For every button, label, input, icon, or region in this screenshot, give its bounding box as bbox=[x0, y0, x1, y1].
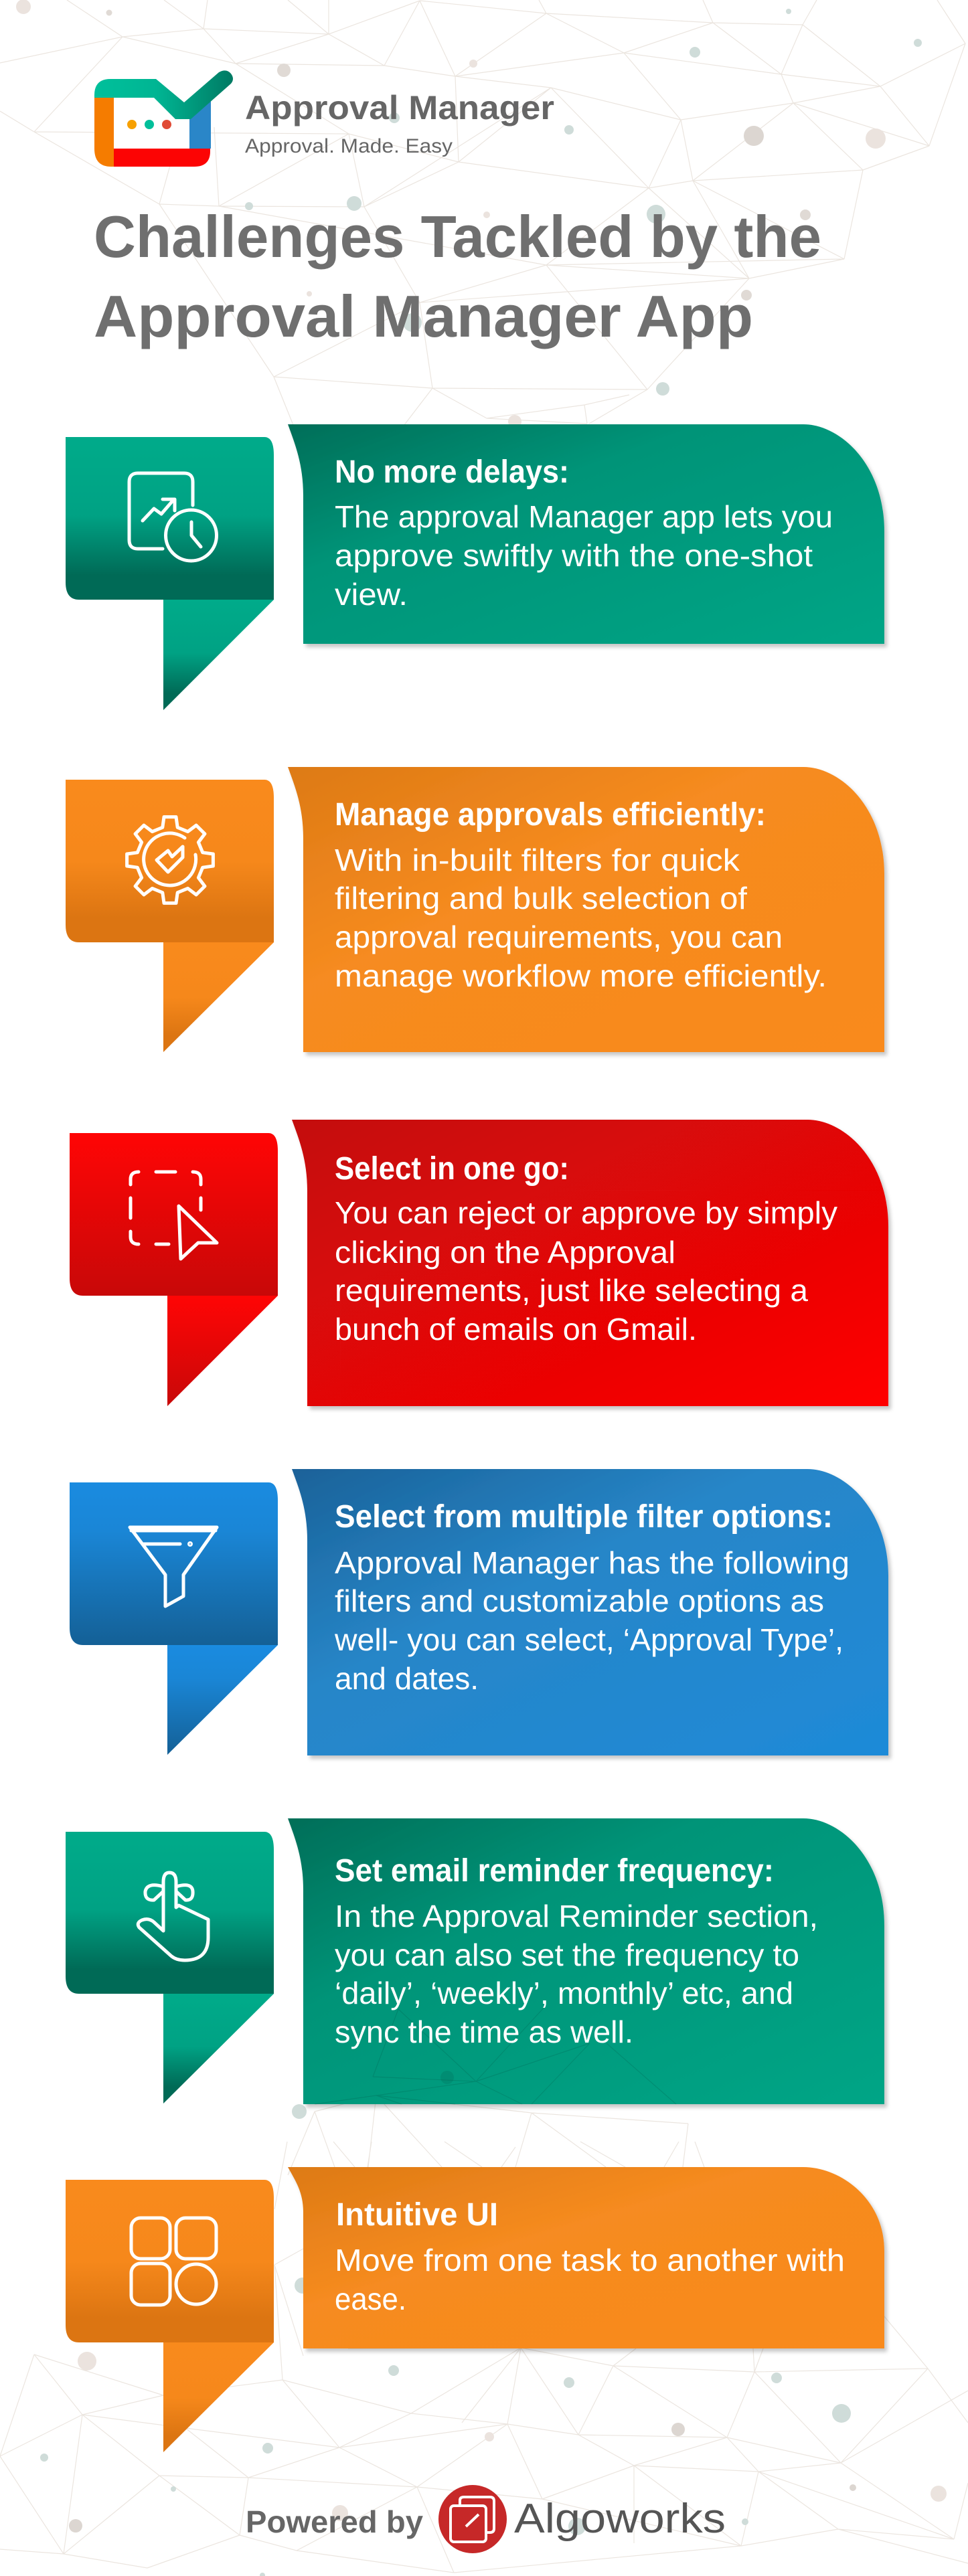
card body: well- you can select, ‘Approval Type’, bbox=[334, 1622, 843, 1657]
card body: and dates. bbox=[335, 1661, 479, 1696]
card body: With in-built filters for quick bbox=[335, 843, 740, 877]
card body: approve swiftly with the one-shot bbox=[335, 538, 813, 573]
card body bbox=[335, 1899, 818, 2049]
icon: app grid bbox=[131, 2218, 216, 2305]
card body: filters and customizable options as bbox=[335, 1583, 824, 1618]
title: Challenges Tackled by the bbox=[94, 203, 821, 270]
icon box green bbox=[66, 1832, 274, 2103]
footer: Algoworks wordmark: Algoworks bbox=[514, 2496, 726, 2542]
card body: ‘daily’, ‘weekly’, monthly’ etc, and bbox=[335, 1976, 793, 2010]
card body: view. bbox=[335, 577, 408, 612]
card body bbox=[335, 2243, 845, 2316]
text card orange bbox=[288, 2167, 884, 2348]
card body bbox=[335, 843, 827, 993]
card heading: Intuitive UI bbox=[336, 2197, 498, 2233]
icon: gear with check bbox=[127, 817, 213, 903]
icon: funnel bbox=[130, 1527, 217, 1606]
card body: clicking on the Approval bbox=[335, 1235, 675, 1270]
card body: you can also set the frequency to bbox=[335, 1938, 799, 1972]
card body: Move from one task to another with bbox=[335, 2243, 845, 2278]
card body bbox=[335, 499, 833, 612]
text card blue bbox=[292, 1469, 888, 1755]
card heading: No more delays: bbox=[335, 454, 569, 490]
icon: chart and clock bbox=[129, 473, 217, 561]
card heading: Set email reminder frequency: bbox=[335, 1853, 774, 1889]
card body: manage workflow more efficiently. bbox=[335, 958, 827, 993]
brand name: Approval Manager bbox=[245, 89, 554, 126]
card body: sync the time as well. bbox=[335, 2014, 633, 2049]
card heading: Manage approvals efficiently: bbox=[335, 797, 766, 833]
title bbox=[94, 203, 821, 349]
panel: select from multiple filter options bbox=[70, 1469, 888, 1755]
card heading: Select in one go: bbox=[335, 1151, 569, 1187]
text card green bbox=[288, 1818, 884, 2104]
brand tagline: Approval. Made. Easy bbox=[245, 135, 453, 157]
card body bbox=[334, 1545, 850, 1696]
background network pattern: top bbox=[0, 0, 965, 428]
card body: The approval Manager app lets you bbox=[335, 499, 833, 534]
icon: Algoworks logo bbox=[438, 2485, 507, 2553]
text card red bbox=[292, 1120, 888, 1406]
icon box blue bbox=[70, 1482, 278, 1755]
card body bbox=[335, 1195, 837, 1347]
panel: manage approvals efficiently bbox=[66, 767, 884, 1052]
background network pattern: bottom bbox=[0, 2095, 968, 2576]
text card green bbox=[288, 424, 884, 644]
panel: select in one go bbox=[70, 1120, 888, 1406]
card body: ease. bbox=[335, 2282, 406, 2316]
title: Approval Manager App bbox=[94, 283, 753, 349]
panel: set email reminder frequency bbox=[66, 1818, 884, 2104]
card heading: Select from multiple filter options: bbox=[335, 1499, 833, 1535]
card body: In the Approval Reminder section, bbox=[335, 1899, 818, 1934]
panel: intuitive UI bbox=[66, 2167, 884, 2452]
card body: requirements, just like selecting a bbox=[335, 1273, 808, 1308]
icon box orange bbox=[66, 780, 274, 1052]
icon: finger with ribbon bbox=[138, 1873, 208, 1960]
icon box orange bbox=[66, 2180, 274, 2452]
card body: bunch of emails on Gmail. bbox=[335, 1312, 697, 1347]
footer: powered by: Powered by bbox=[246, 2504, 423, 2539]
icon: dashed selection and cursor bbox=[131, 1172, 217, 1259]
faint network over card bbox=[315, 2006, 676, 2104]
icon box red bbox=[70, 1133, 278, 1406]
icon box green bbox=[66, 437, 274, 710]
card body: filtering and bulk selection of bbox=[335, 881, 747, 916]
card body: You can reject or approve by simply bbox=[335, 1195, 837, 1230]
card body: approval requirements, you can bbox=[335, 920, 783, 954]
logo: Approval Manager app icon bbox=[94, 70, 233, 167]
card body: Approval Manager has the following bbox=[335, 1545, 850, 1580]
panel: no more delays bbox=[66, 424, 884, 710]
text card orange bbox=[288, 767, 884, 1052]
